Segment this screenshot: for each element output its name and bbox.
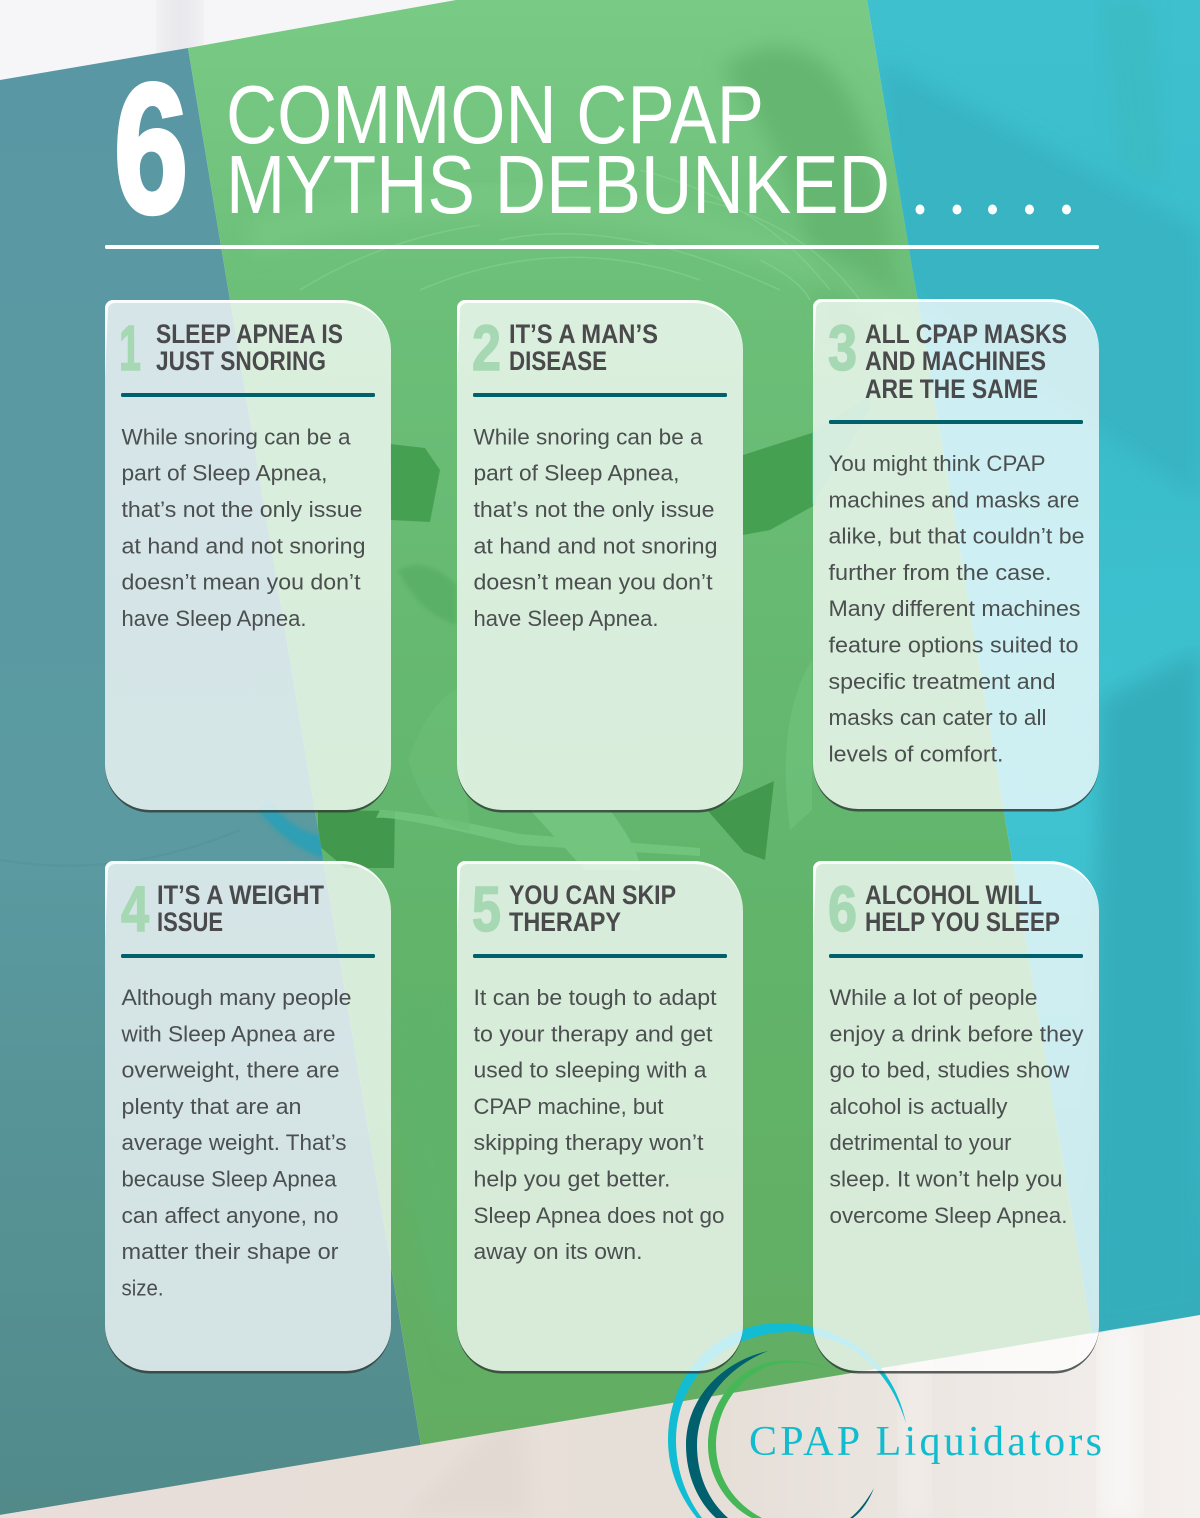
body text: alcohol is actually <box>830 1094 1008 1119</box>
body text: because Sleep Apnea <box>122 1166 337 1192</box>
title line 1: COMMON CPAP <box>226 68 764 161</box>
body text: part of Sleep Apnea, <box>122 461 328 486</box>
body text: It can be tough to adapt <box>474 985 717 1010</box>
body text: levels of comfort. <box>828 741 1004 766</box>
number 6: 6 <box>828 873 857 945</box>
heading: IT’S A MAN’S <box>509 319 658 349</box>
body text: Although many people <box>122 985 352 1010</box>
body text: have Sleep Apnea. <box>122 606 306 631</box>
heading <box>157 880 324 937</box>
body text <box>828 451 1084 766</box>
logo arcs <box>668 1323 906 1518</box>
number 2: 2 <box>472 312 501 384</box>
body text: sleep. It won’t help you <box>830 1166 1062 1192</box>
body text: Many different machines <box>828 596 1080 621</box>
heading: IT’S A WEIGHT <box>157 880 324 910</box>
body text: have Sleep Apnea. <box>474 606 658 631</box>
body text: with Sleep Apnea are <box>120 1021 336 1046</box>
heading: ARE THE SAME <box>865 374 1038 404</box>
panel: myth 1 <box>105 300 391 812</box>
heading: YOU CAN SKIP <box>509 880 676 910</box>
background: patient face in green tint <box>250 47 905 1370</box>
heading: AND MACHINES <box>865 346 1046 376</box>
heading <box>865 880 1060 937</box>
body text: specific treatment and <box>828 669 1056 694</box>
number 1: 1 <box>119 312 141 384</box>
panel: myth 5 <box>457 861 743 1374</box>
body text: that’s not the only issue <box>474 497 714 522</box>
heading: JUST SNORING <box>156 346 326 376</box>
body text: While snoring can be a <box>474 424 703 449</box>
body text: overweight, there are <box>122 1058 340 1083</box>
body text: CPAP machine, but <box>474 1094 664 1119</box>
body text: doesn’t mean you don’t <box>474 570 713 595</box>
heading: ISSUE <box>157 907 223 937</box>
body text: that’s not the only issue <box>122 497 362 522</box>
body text: You might think CPAP <box>828 451 1046 476</box>
title line 2: MYTHS DEBUNKED <box>226 138 890 231</box>
heading <box>509 880 676 937</box>
body text: matter their shape or <box>122 1239 339 1264</box>
body text <box>120 985 352 1300</box>
body text: at hand and not snoring <box>474 533 718 558</box>
body text: part of Sleep Apnea, <box>474 461 680 486</box>
body text <box>122 424 366 631</box>
body text: Sleep Apnea does not go <box>474 1203 724 1228</box>
body text: to your therapy and get <box>474 1021 713 1046</box>
number 4: 4 <box>121 873 149 945</box>
logo wordmark: CPAP Liquidators <box>749 1419 1102 1465</box>
panel: myth 3 <box>813 299 1099 812</box>
heading: ALCOHOL WILL <box>865 880 1042 910</box>
body text: further from the case. <box>828 560 1052 585</box>
body text: overcome Sleep Apnea. <box>830 1203 1068 1228</box>
body text <box>474 985 724 1264</box>
body text: size. <box>122 1275 164 1300</box>
heading: ALL CPAP MASKS <box>865 319 1067 349</box>
body text: enjoy a drink before they <box>830 1021 1084 1046</box>
body text: can affect anyone, no <box>122 1203 338 1228</box>
heading: DISEASE <box>509 346 607 376</box>
body text: help you get better. <box>474 1166 670 1192</box>
heading: HELP YOU SLEEP <box>865 907 1060 937</box>
heading <box>865 319 1067 404</box>
body text: While snoring can be a <box>122 424 351 449</box>
heading: THERAPY <box>509 907 621 937</box>
panel: myth 4 <box>105 861 391 1374</box>
body text: skipping therapy won’t <box>474 1130 704 1155</box>
heading <box>509 319 658 376</box>
heading: SLEEP APNEA IS <box>156 319 343 349</box>
body text: machines and masks are <box>828 487 1080 512</box>
number 3: 3 <box>828 312 857 384</box>
number 5: 5 <box>472 873 501 945</box>
body text: go to bed, studies show <box>830 1058 1070 1083</box>
body text <box>474 424 718 631</box>
body text: detrimental to your <box>830 1130 1012 1155</box>
body text: alike, but that couldn’t be <box>828 524 1084 549</box>
body text: used to sleeping with a <box>474 1058 707 1083</box>
panel: myth 2 <box>457 300 743 812</box>
body text: plenty that are an <box>122 1094 302 1119</box>
title dots <box>916 204 1071 214</box>
body text: doesn’t mean you don’t <box>122 570 361 595</box>
body text: at hand and not snoring <box>122 533 366 558</box>
body text: average weight. That’s <box>122 1130 346 1155</box>
body text: While a lot of people <box>830 985 1038 1010</box>
title numeral 6: 6 <box>114 45 188 251</box>
body text <box>830 985 1084 1228</box>
body text: away on its own. <box>474 1239 642 1264</box>
title <box>114 45 890 251</box>
body text: feature options suited to <box>828 632 1078 658</box>
panel: myth 6 <box>813 861 1099 1374</box>
body text: masks can cater to all <box>828 705 1047 730</box>
heading <box>156 319 343 376</box>
